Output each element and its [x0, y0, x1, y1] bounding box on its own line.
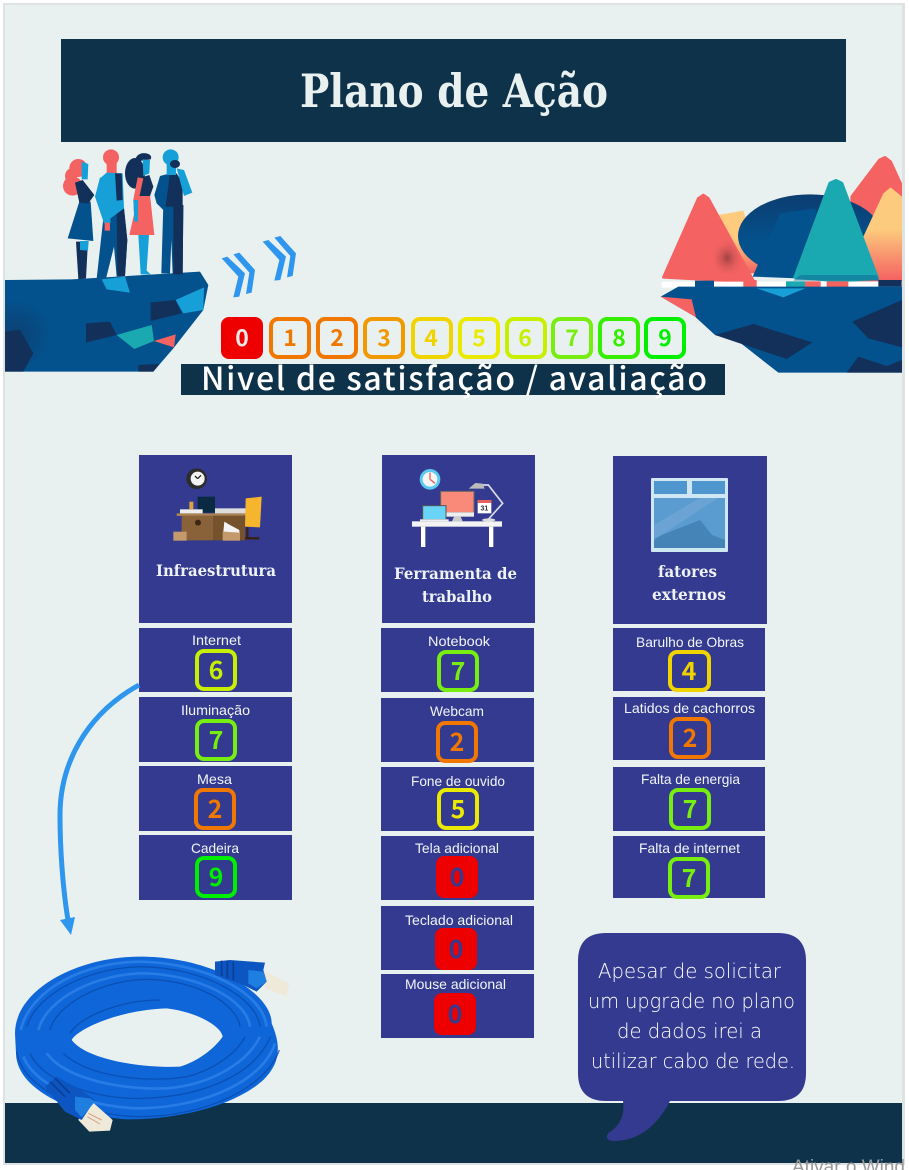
score 5: 5 [472, 319, 486, 353]
score 7: 7 [565, 319, 579, 353]
row: Iluminação: Iluminação [181, 702, 250, 718]
row: Webcam: Webcam [430, 703, 484, 719]
callout: speech bubble [578, 933, 806, 1141]
row: Falta de energia: 7 [683, 790, 697, 826]
row: Falta de internet: Falta de internet [639, 840, 740, 856]
icon: workstation desk: 31 [480, 506, 488, 513]
row: Latidos de cachorros [613, 697, 765, 760]
score 7 [553, 319, 591, 357]
icon: office desk with clock [173, 468, 262, 541]
connector top [215, 960, 289, 997]
row: Webcam: 2 [450, 723, 464, 759]
rating scale [221, 317, 684, 359]
row: Tela adicional: 0 [450, 858, 464, 894]
row: Fone de ouvido: 5 [451, 790, 465, 826]
row: Fone de ouvido [381, 767, 534, 831]
icon: workstation desk [412, 469, 503, 547]
score 6 [507, 319, 545, 357]
row: Iluminação [139, 697, 292, 762]
row: Latidos de cachorros: Latidos de cachorros [624, 700, 755, 716]
row: Latidos de cachorros: 2 [683, 719, 697, 755]
panel: fatores externos [613, 456, 767, 624]
person 4 [154, 149, 192, 274]
arrow: internet to cable [60, 685, 139, 935]
heading: Ferramenta de [394, 564, 517, 583]
icon: chevron arrows [222, 236, 296, 297]
row: Teclado adicional [381, 906, 534, 970]
row: Barulho de Obras [613, 628, 765, 691]
row: Fone de ouvido: Fone de ouvido [411, 773, 505, 789]
score 4: 4 [424, 319, 438, 353]
row: Tela adicional: Tela adicional [415, 840, 499, 856]
footer band [5, 1103, 902, 1163]
row: Notebook [381, 628, 534, 692]
row: Cadeira [139, 835, 292, 900]
score 8: 8 [612, 319, 626, 353]
score 4 [413, 319, 451, 357]
row: Teclado adicional: Teclado adicional [405, 912, 513, 928]
panel: fatores externos: externos [652, 585, 726, 604]
score 9 [646, 319, 684, 357]
row: Notebook: 7 [451, 652, 465, 688]
row: Mesa [139, 766, 292, 831]
callout: speech bubble: um upgrade no plano [588, 989, 795, 1013]
score 1 [271, 319, 309, 357]
callout: speech bubble: de dados irei a [617, 1019, 762, 1043]
title banner [61, 39, 846, 142]
person 2 [95, 149, 127, 279]
row: Falta de energia [613, 767, 765, 831]
row: Notebook: Notebook [428, 633, 491, 649]
person 3 [125, 153, 154, 274]
row: Falta de internet [613, 836, 765, 898]
row: Falta de energia: Falta de energia [641, 771, 740, 787]
row: Mouse adicional: Mouse adicional [405, 976, 506, 992]
row: Internet: Internet [192, 632, 241, 648]
callout: speech bubble: utilizar cabo de rede. [591, 1049, 795, 1073]
score 3: 3 [377, 319, 391, 353]
heading: fatores [658, 562, 717, 581]
score 2 [318, 319, 356, 357]
row: Cadeira: 9 [209, 858, 223, 894]
panel: infraestrutura [139, 455, 292, 623]
score 5 [460, 319, 498, 357]
icon: window [651, 478, 728, 552]
row: Cadeira: Cadeira [191, 840, 239, 856]
row: Mesa: Mesa [197, 771, 232, 787]
heading: Infraestrutura [156, 561, 276, 580]
row: Iluminação: 7 [209, 721, 223, 757]
person 1 [63, 159, 94, 279]
score 2: 2 [330, 319, 344, 353]
row: Webcam [381, 698, 534, 762]
row: Internet [139, 628, 292, 692]
panel: ferramenta de trabalho [382, 455, 535, 623]
score 6: 6 [518, 319, 532, 353]
row: Teclado adicional: 0 [449, 930, 463, 966]
score 1: 1 [283, 319, 297, 353]
illustration: network cable [15, 957, 289, 1132]
score 0: 0 [235, 319, 249, 353]
row: Tela adicional [381, 836, 534, 900]
row: Mouse adicional: 0 [448, 995, 462, 1031]
score 9: 9 [658, 319, 672, 353]
row: Internet: 6 [209, 651, 223, 687]
row: Mesa: 2 [208, 790, 222, 826]
score 0 [221, 317, 263, 359]
row: Mouse adicional [381, 974, 534, 1038]
panel: ferramenta de trabalho: trabalho [422, 587, 492, 606]
title banner: Plano de Ação [300, 64, 608, 118]
illustration: people on cliff [5, 149, 208, 372]
row: Falta de internet: 7 [682, 859, 696, 895]
illustration: forest island [661, 157, 907, 373]
row: Barulho de Obras: 4 [682, 652, 697, 688]
score 8 [600, 319, 638, 357]
callout: speech bubble: Apesar de solicitar [598, 959, 782, 983]
row: Barulho de Obras: Barulho de Obras [636, 634, 744, 650]
score 3 [365, 319, 403, 357]
scale caption: Nivel de satisfação / avaliação [201, 354, 707, 400]
connector bottom [45, 1077, 113, 1132]
